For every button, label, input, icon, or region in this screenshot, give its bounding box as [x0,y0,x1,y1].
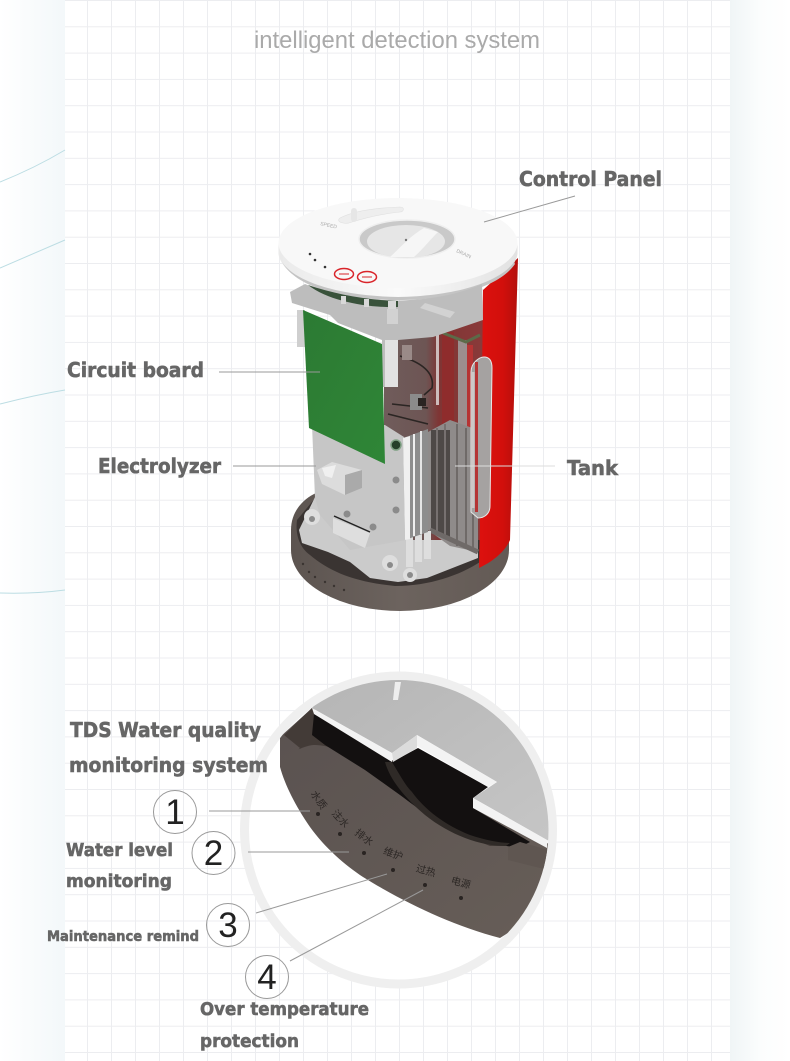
grey plate [312,680,548,840]
label: TDS Water quality monitoring system: monitoring system [69,753,268,777]
callout 3 [206,874,387,946]
lid status dots [309,253,326,268]
label: Electrolyzer: Electrolyzer [98,454,221,478]
label: Maintenance remind: Maintenance remind [47,929,199,945]
inner pipe and electronics [402,345,426,410]
panel Chinese labels: 维护 [382,844,405,863]
speed label: SPEED [320,221,338,231]
callout 1 [154,790,310,834]
label: Over temperature protection: Over temperature [200,999,369,1020]
base front indicator dots [302,563,345,591]
upper bracket [290,284,483,340]
top lid surface [278,198,518,288]
panel Chinese labels: 过热 [415,862,437,879]
callout 3: 3 [218,906,238,945]
dial knob [367,225,445,258]
right latch [508,842,548,870]
panel Chinese labels: 排水 [352,826,376,849]
tank vertical stripes [436,332,473,455]
panel Chinese labels: 注水 [329,807,352,830]
brown front band [280,708,560,938]
dial housing [359,220,455,258]
lens ring [244,676,552,984]
red outer shell [479,258,518,568]
upper dark shadow band [284,708,510,846]
red lid marks [334,268,376,282]
recess inner lip [385,762,510,846]
panel Chinese labels [308,789,472,891]
product cutaway illustration [278,198,518,611]
speed slider [339,207,403,223]
callout 4 [246,890,423,998]
label: Water level monitoring: monitoring [66,871,172,892]
tank interior [384,320,484,540]
translucent tank cells [428,420,478,552]
white plate edges [312,708,547,848]
label: Control Panel [484,167,662,222]
label: Over temperature protection [200,999,369,1052]
tray blocks [304,509,431,582]
circuit board [303,310,385,464]
tray [299,495,478,582]
electrolyzer plate [312,425,406,550]
dark recess [312,714,530,847]
electrolyzer bracket [317,462,362,495]
title: intelligent detection system [254,27,540,54]
label: Circuit board: Circuit board [67,358,204,382]
left post [297,310,305,347]
label: Control Panel: Control Panel [519,167,662,191]
label: Over temperature protection: protection [200,1031,299,1052]
panel Chinese labels: 水质 [308,789,329,812]
panel Chinese labels: 电源 [450,874,472,891]
label: Water level monitoring: Water level [66,840,173,861]
left background strip with curves [0,0,65,1061]
green connector [391,440,401,450]
zoom lens detail [244,672,560,984]
lid silver edge [282,262,515,300]
base [291,493,509,611]
label: Tank: Tank [567,456,619,480]
panel indicator dots [316,812,463,900]
circuit strip [443,333,480,342]
base inner recess [297,497,480,586]
callout 2 [192,832,349,874]
callout 4: 4 [257,958,277,997]
tray slot and screws [309,476,413,578]
label: TDS Water quality monitoring system: TDS Water quality [70,718,261,742]
bracket arm [420,303,455,318]
white post [382,340,398,387]
white stem [393,682,401,700]
glass capsule [471,357,492,518]
drain label: DRAIN [455,248,472,261]
label: Water level monitoring [66,840,173,892]
label: TDS Water quality monitoring system [69,718,268,777]
callout 1: 1 [165,793,185,832]
center post [387,309,398,324]
callout 2: 2 [204,834,223,873]
electrolyzer fins [403,429,428,540]
inner dark wiring [388,356,432,424]
small board under lid with pins [308,285,398,309]
top lid side rim [278,243,518,300]
right background strip [730,0,790,1061]
